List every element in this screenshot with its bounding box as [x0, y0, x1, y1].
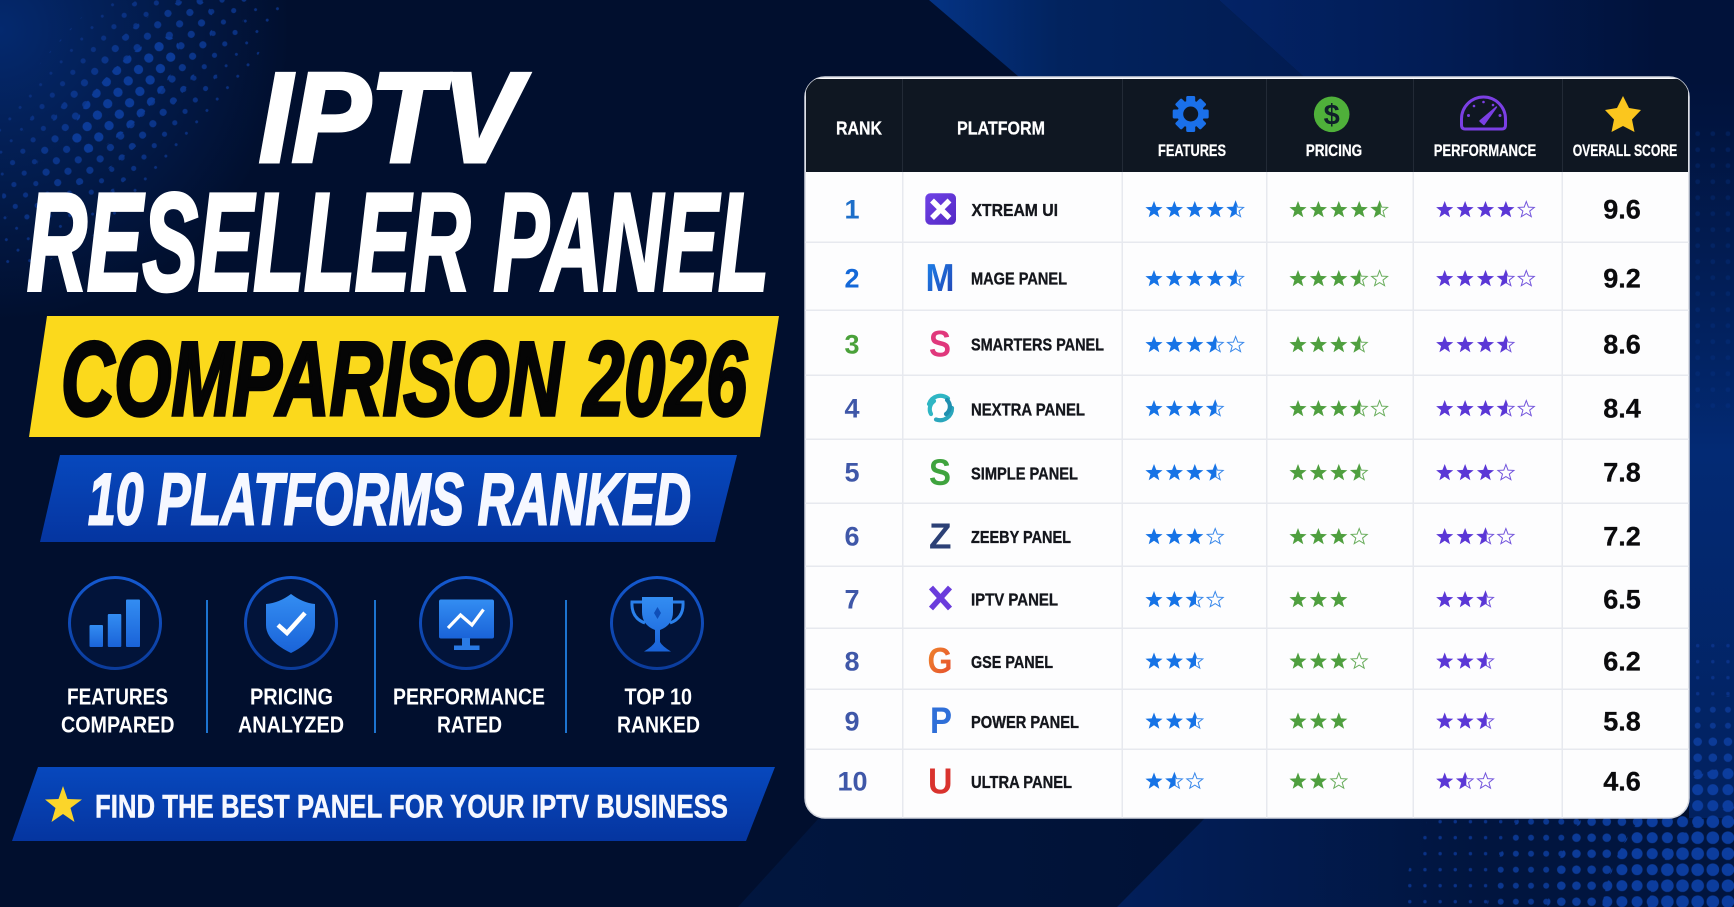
icon: shield check: [246, 578, 336, 668]
logo: Ultra Panel: U: [928, 760, 952, 802]
row 6: Zeeby Panel: [844, 516, 1641, 556]
header: features: [1158, 96, 1226, 160]
header: overall score: OVERALL SCORE: [1573, 142, 1677, 160]
row 5: Simple Panel: [844, 452, 1641, 493]
icon: monitor chart: [420, 578, 512, 668]
row 10: Ultra Panel: [837, 760, 1641, 802]
row 10: Ultra Panel: 10: [837, 766, 868, 796]
banner: 10 platforms ranked: 10 PLATFORMS RANKED: [88, 460, 691, 540]
row 4: Nextra Panel: 8.4: [1603, 394, 1641, 424]
icon row: [61, 578, 702, 738]
banner: comparison 2026: COMPARISON 2026: [61, 321, 747, 438]
logo: IPTV Panel: [931, 588, 950, 608]
logo: Power Panel: P: [930, 700, 952, 741]
label: top 10 ranked: [617, 684, 700, 738]
label: features compared: [61, 684, 174, 738]
header: features: FEATURES: [1158, 142, 1226, 160]
row 4: Nextra Panel: NEXTRA PANEL: [971, 400, 1085, 420]
row 7: IPTV Panel: 7: [844, 584, 860, 614]
banner: 10 platforms ranked: [40, 455, 737, 542]
icon: trophy: [612, 578, 702, 668]
table header: [836, 96, 1677, 160]
row 6: Zeeby Panel: 6: [844, 522, 860, 552]
label: performance rated: PERFORMANCE: [393, 684, 545, 710]
logo: Xtream UI: [925, 193, 956, 225]
label: features compared: COMPARED: [61, 712, 174, 738]
row 7: IPTV Panel: IPTV PANEL: [971, 590, 1058, 610]
header: overall score: [1573, 96, 1677, 160]
row 2: Mage Panel: [844, 257, 1641, 300]
panel: ranking table: [805, 77, 1689, 818]
row 2: Mage Panel: 2: [844, 264, 860, 294]
label: performance rated: [393, 684, 545, 738]
icon: yellow star: [45, 786, 82, 822]
row 7: IPTV Panel: [844, 584, 1641, 614]
row 4: Nextra Panel: 4: [844, 394, 860, 424]
header: platform: PLATFORM: [957, 118, 1045, 138]
banner: comparison 2026: [29, 316, 779, 438]
row 6: Zeeby Panel: 7.2: [1603, 522, 1641, 552]
logo: Simple Panel: S: [929, 452, 951, 493]
row 5: Simple Panel: 5: [844, 458, 860, 488]
icon: gauge: [1462, 97, 1506, 129]
label: top 10 ranked: TOP 10: [624, 684, 692, 710]
feature: pricing analyzed: [238, 578, 344, 738]
row 3: Smarters Panel: 3: [844, 330, 860, 360]
row 1: Xtream UI: 1: [844, 194, 860, 224]
row 3: Smarters Panel: SMARTERS PANEL: [971, 334, 1104, 354]
icon: bar chart: [70, 578, 160, 668]
label: performance rated: RATED: [437, 712, 502, 738]
row 9: Power Panel: 5.8: [1603, 706, 1641, 736]
row 10: Ultra Panel: ULTRA PANEL: [971, 772, 1072, 792]
row 4: Nextra Panel: [844, 394, 1641, 424]
row 5: Simple Panel: 7.8: [1603, 458, 1641, 488]
row 1: Xtream UI: [844, 193, 1641, 225]
row 8: GSE Panel: [844, 640, 1641, 681]
row 8: GSE Panel: GSE PANEL: [971, 652, 1053, 672]
row 5: Simple Panel: SIMPLE PANEL: [971, 464, 1078, 484]
row 7: IPTV Panel: 6.5: [1603, 584, 1641, 614]
row 2: Mage Panel: 9.2: [1603, 264, 1641, 294]
logo: Nextra Panel: [929, 396, 952, 420]
row 1: Xtream UI: 9.6: [1603, 194, 1641, 224]
logo: Smarters Panel: S: [929, 324, 951, 364]
row 3: Smarters Panel: 8.6: [1603, 330, 1641, 360]
logo: Zeeby Panel: Z: [929, 516, 952, 556]
header: pricing: [1306, 96, 1362, 160]
logo: Mage Panel: M: [926, 257, 954, 300]
row 2: Mage Panel: MAGE PANEL: [971, 268, 1067, 288]
banner: find the best panel: [12, 767, 775, 841]
row 8: GSE Panel: 8: [844, 646, 860, 676]
icon: gear: [1173, 96, 1209, 132]
row 9: Power Panel: [844, 700, 1641, 741]
icon: dollar coin: $: [1324, 100, 1340, 132]
row 10: Ultra Panel: 4.6: [1603, 766, 1641, 796]
row 8: GSE Panel: 6.2: [1603, 646, 1641, 676]
title: RESELLER PANEL: RESELLER PANEL: [27, 165, 769, 320]
header: pricing: PRICING: [1306, 142, 1362, 160]
title: IPTV: IPTV: [259, 46, 530, 188]
icon: gold star: [1605, 96, 1641, 132]
label: top 10 ranked: RANKED: [617, 712, 700, 738]
label: pricing analyzed: ANALYZED: [238, 712, 344, 738]
row 1: Xtream UI: XTREAM UI: [972, 200, 1058, 220]
row 6: Zeeby Panel: ZEEBY PANEL: [971, 527, 1071, 547]
logo: GSE Panel: G: [928, 640, 952, 681]
row 3: Smarters Panel: [844, 324, 1641, 364]
feature: top 10 ranked: [612, 578, 702, 738]
row 9: Power Panel: 9: [844, 706, 860, 736]
header: performance: [1434, 97, 1536, 160]
header: performance: PERFORMANCE: [1434, 142, 1536, 160]
row 9: Power Panel: POWER PANEL: [971, 712, 1079, 732]
label: pricing analyzed: [238, 684, 344, 738]
tagline: FIND THE BEST PANEL FOR YOUR IPTV BUSINESS: [95, 788, 728, 824]
header: rank: RANK: [836, 118, 882, 138]
label: features compared: FEATURES: [67, 684, 168, 710]
label: pricing analyzed: PRICING: [250, 684, 333, 710]
feature: performance rated: [393, 578, 545, 738]
feature: features compared: [61, 578, 174, 738]
